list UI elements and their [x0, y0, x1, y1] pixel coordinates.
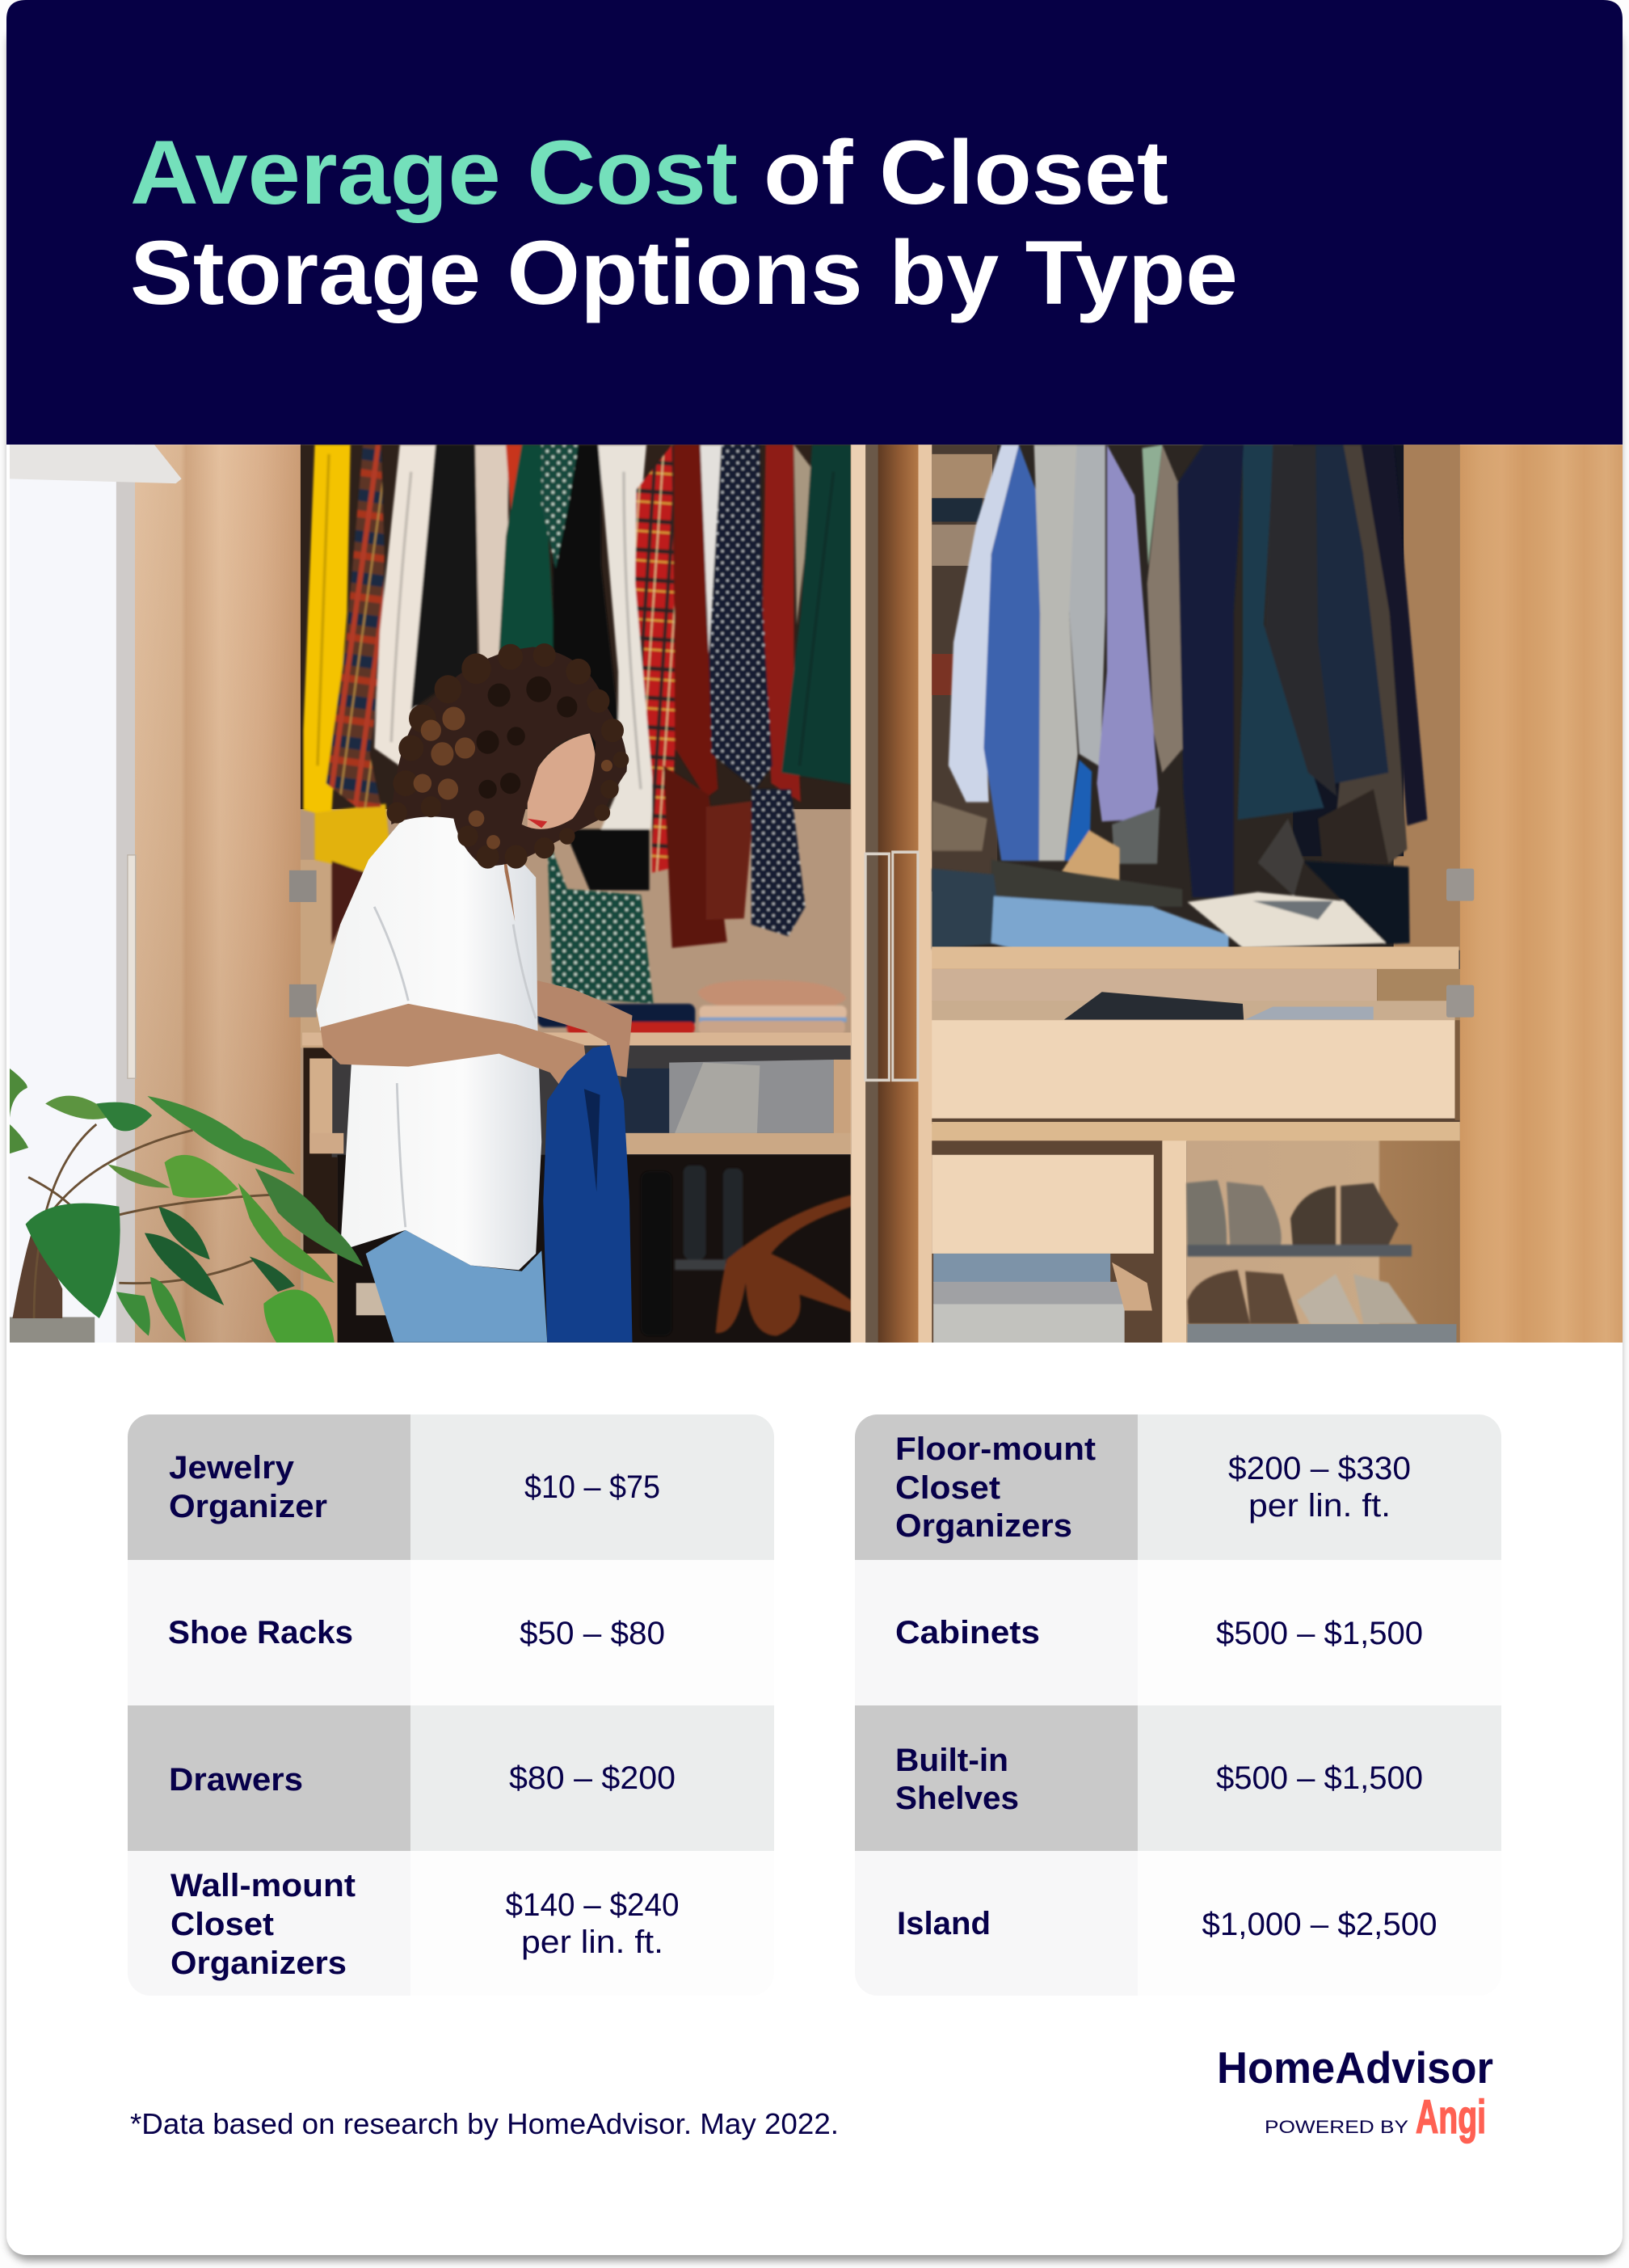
plant	[10, 1069, 363, 1347]
jeans	[366, 1230, 547, 1343]
left table values	[506, 1469, 679, 1960]
right door panel	[1460, 445, 1626, 1344]
door handles	[865, 852, 918, 1080]
right table values	[1202, 1451, 1437, 1942]
lower compartments	[1186, 1140, 1460, 1344]
curly hair and face	[387, 643, 629, 869]
left table labels: Organizer	[169, 1489, 327, 1524]
right table labels: Floor-mount	[895, 1431, 1096, 1467]
left table labels: Wall-mount	[170, 1868, 356, 1903]
side compartments	[932, 445, 997, 892]
right table values: per lin. ft.	[1248, 1488, 1391, 1524]
left table values: $10 – $75	[524, 1469, 660, 1505]
logo: HomeAdvisor powered by Angi: Angi	[1416, 2091, 1486, 2144]
left table labels: Organizers	[170, 1946, 347, 1981]
left table labels: Closet	[170, 1907, 274, 1942]
right half of wardrobe	[852, 445, 1626, 1345]
left table values: $50 – $80	[520, 1616, 665, 1651]
hinges left	[289, 871, 317, 1018]
right table values: $500 – $1,500	[1216, 1760, 1423, 1796]
table: right	[855, 1414, 1501, 1996]
left table labels: Drawers	[169, 1762, 303, 1798]
right table values: $200 – $330	[1228, 1451, 1411, 1486]
right table labels: Shelves	[895, 1781, 1019, 1816]
forearm	[320, 1004, 585, 1084]
right table values: $500 – $1,500	[1216, 1616, 1423, 1651]
title: of Closet	[764, 122, 1168, 223]
shoes	[1186, 1180, 1418, 1324]
left table values: per lin. ft.	[521, 1924, 663, 1960]
right table labels: Closet	[895, 1470, 1000, 1506]
left half of wardrobe with woman and plant	[0, 436, 889, 1358]
right table labels: Built-in	[895, 1743, 1008, 1778]
middle shelf and drawer	[932, 946, 1459, 969]
boots and bag	[641, 1166, 852, 1336]
title: Storage Options by Type	[130, 222, 1238, 323]
logo: HomeAdvisor powered by Angi: HomeAdvisor	[1217, 2042, 1493, 2093]
header band	[6, 0, 1623, 445]
lamp shade	[10, 445, 182, 483]
right table labels: Island	[897, 1906, 991, 1941]
left table values: $140 – $240	[506, 1887, 679, 1923]
fabric basket	[933, 1254, 1110, 1283]
right table cells	[855, 1414, 1501, 1996]
left table labels: Jewelry	[169, 1450, 295, 1486]
hanging clothes right	[949, 445, 1427, 897]
left table values: $80 – $200	[509, 1760, 676, 1796]
white shirt	[317, 812, 541, 1270]
hinges right	[1446, 869, 1474, 1018]
lower shelf and basket	[302, 1032, 851, 1045]
hanging clothes left	[303, 445, 852, 1004]
title: Average Cost	[130, 122, 738, 223]
right table values: $1,000 – $2,500	[1202, 1907, 1437, 1942]
right table labels	[895, 1431, 1096, 1941]
right table labels: Organizers	[895, 1508, 1072, 1544]
photo: woman at open wardrobe	[0, 436, 1626, 1358]
arm behind	[536, 980, 633, 1077]
folded hats and sweaters	[537, 980, 847, 1034]
folded piles on shelf	[932, 801, 1410, 957]
left table labels	[168, 1450, 356, 1981]
right door edge	[850, 445, 853, 1343]
right table labels: Cabinets	[895, 1615, 1040, 1650]
left table labels: Shoe Racks	[168, 1615, 353, 1650]
title	[130, 122, 1238, 323]
left table cells	[128, 1414, 774, 1996]
logo: HomeAdvisor powered by Angi: POWERED BY	[1265, 2117, 1408, 2137]
table: left	[128, 1414, 774, 1996]
blue fabric	[543, 1045, 633, 1343]
logo: HomeAdvisor powered by Angi	[1217, 2042, 1493, 2144]
footnote: *Data based on research by HomeAdvisor. May 2022.	[130, 2107, 839, 2140]
